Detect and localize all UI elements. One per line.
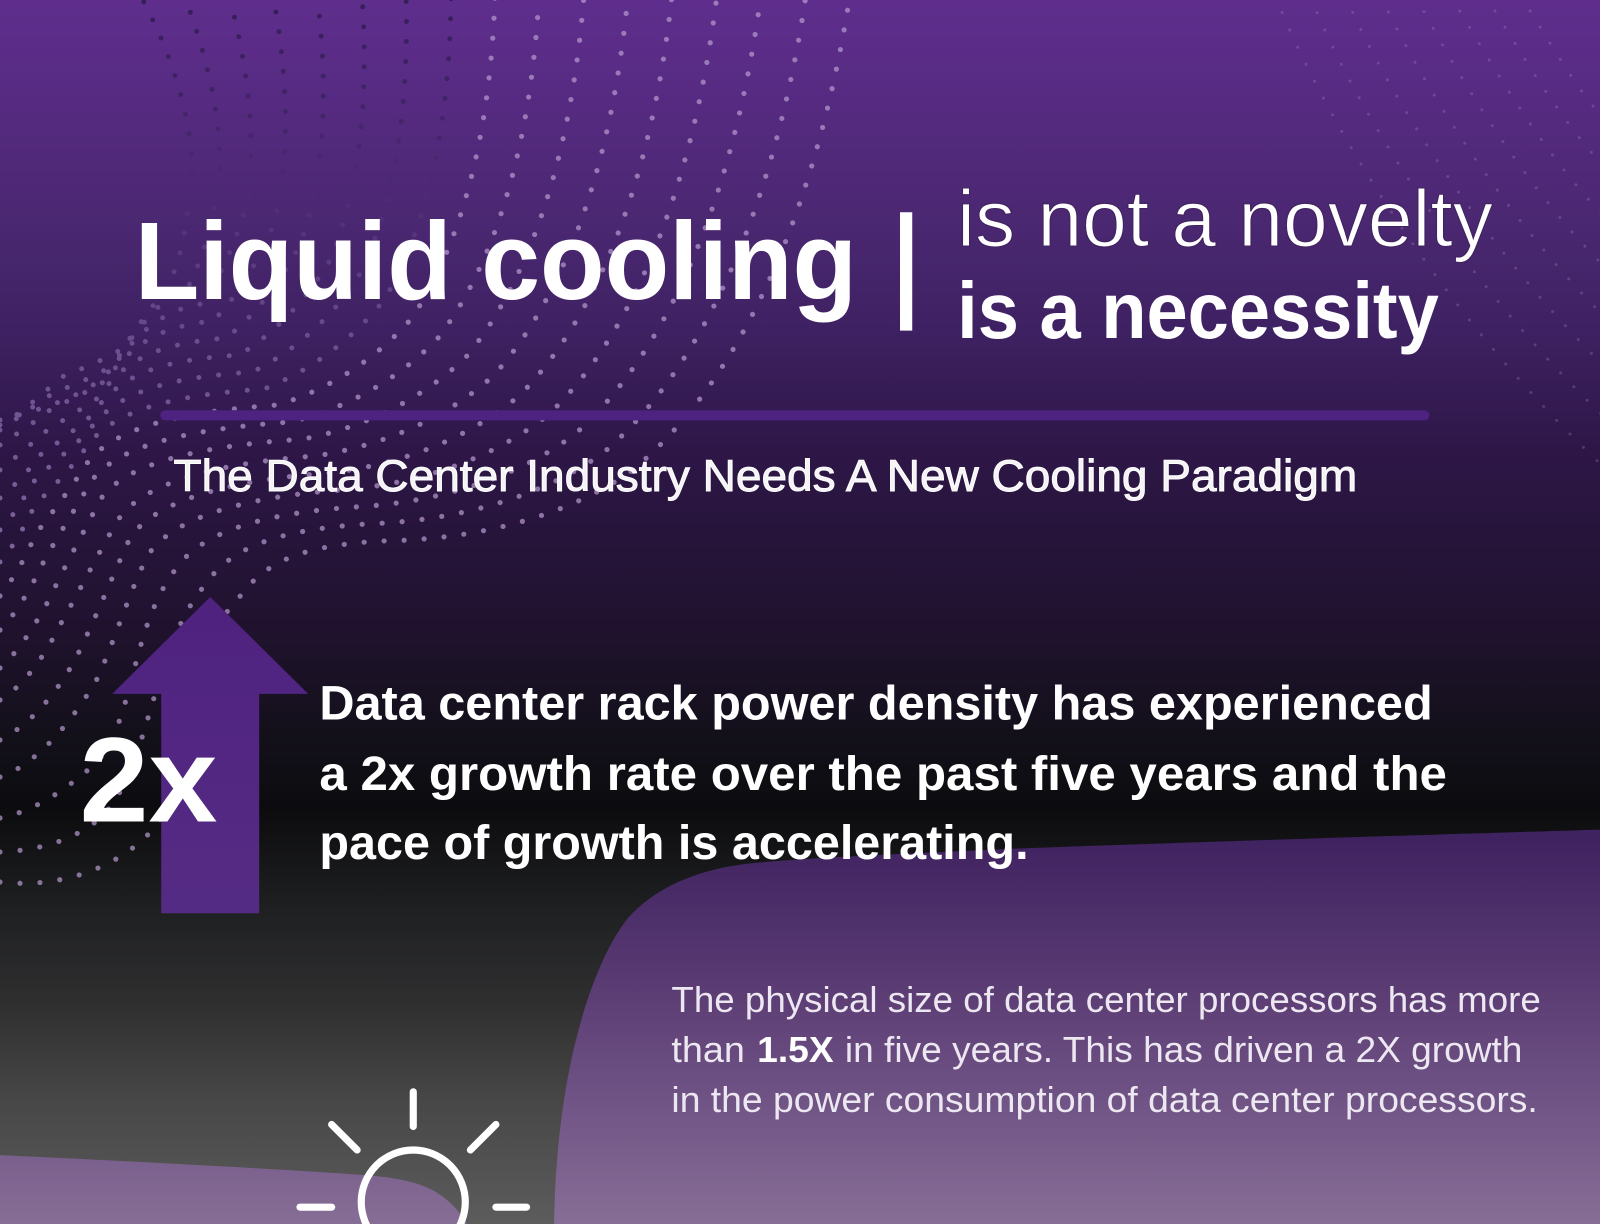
icon: light bulb with rays	[300, 1092, 527, 1224]
main statement text: pace of growth is accelerating.	[319, 817, 1029, 870]
title: is a necessity: is a necessity	[957, 266, 1439, 355]
divider line	[160, 410, 1430, 420]
title: Liquid cooling: Liquid cooling	[135, 200, 857, 323]
subtitle: The Data Center Industry Needs A New Cooling Paradigm	[173, 450, 1357, 501]
processor paragraph: 1.5X	[757, 1030, 834, 1070]
processor paragraph: The physical size of data center processors has more	[671, 980, 1541, 1020]
lower right wave panel	[554, 830, 1600, 1224]
2x stat: 2x	[80, 712, 217, 847]
main statement text: a 2x growth rate over the past five years and the	[319, 748, 1447, 801]
icon: up arrow	[112, 597, 308, 913]
title: is not a novelty: is not a novelty	[957, 174, 1493, 263]
title separator bar	[900, 212, 912, 331]
lower left wave panel	[0, 1155, 467, 1224]
processor paragraph: in five years. This has driven a 2X growth	[845, 1030, 1522, 1070]
processor paragraph	[671, 980, 1541, 1120]
main statement text: Data center rack power density has experienced	[319, 677, 1433, 730]
processor paragraph: in the power consumption of data center processors.	[671, 1080, 1538, 1120]
processor paragraph: than	[671, 1030, 745, 1070]
main statement text	[319, 677, 1447, 870]
